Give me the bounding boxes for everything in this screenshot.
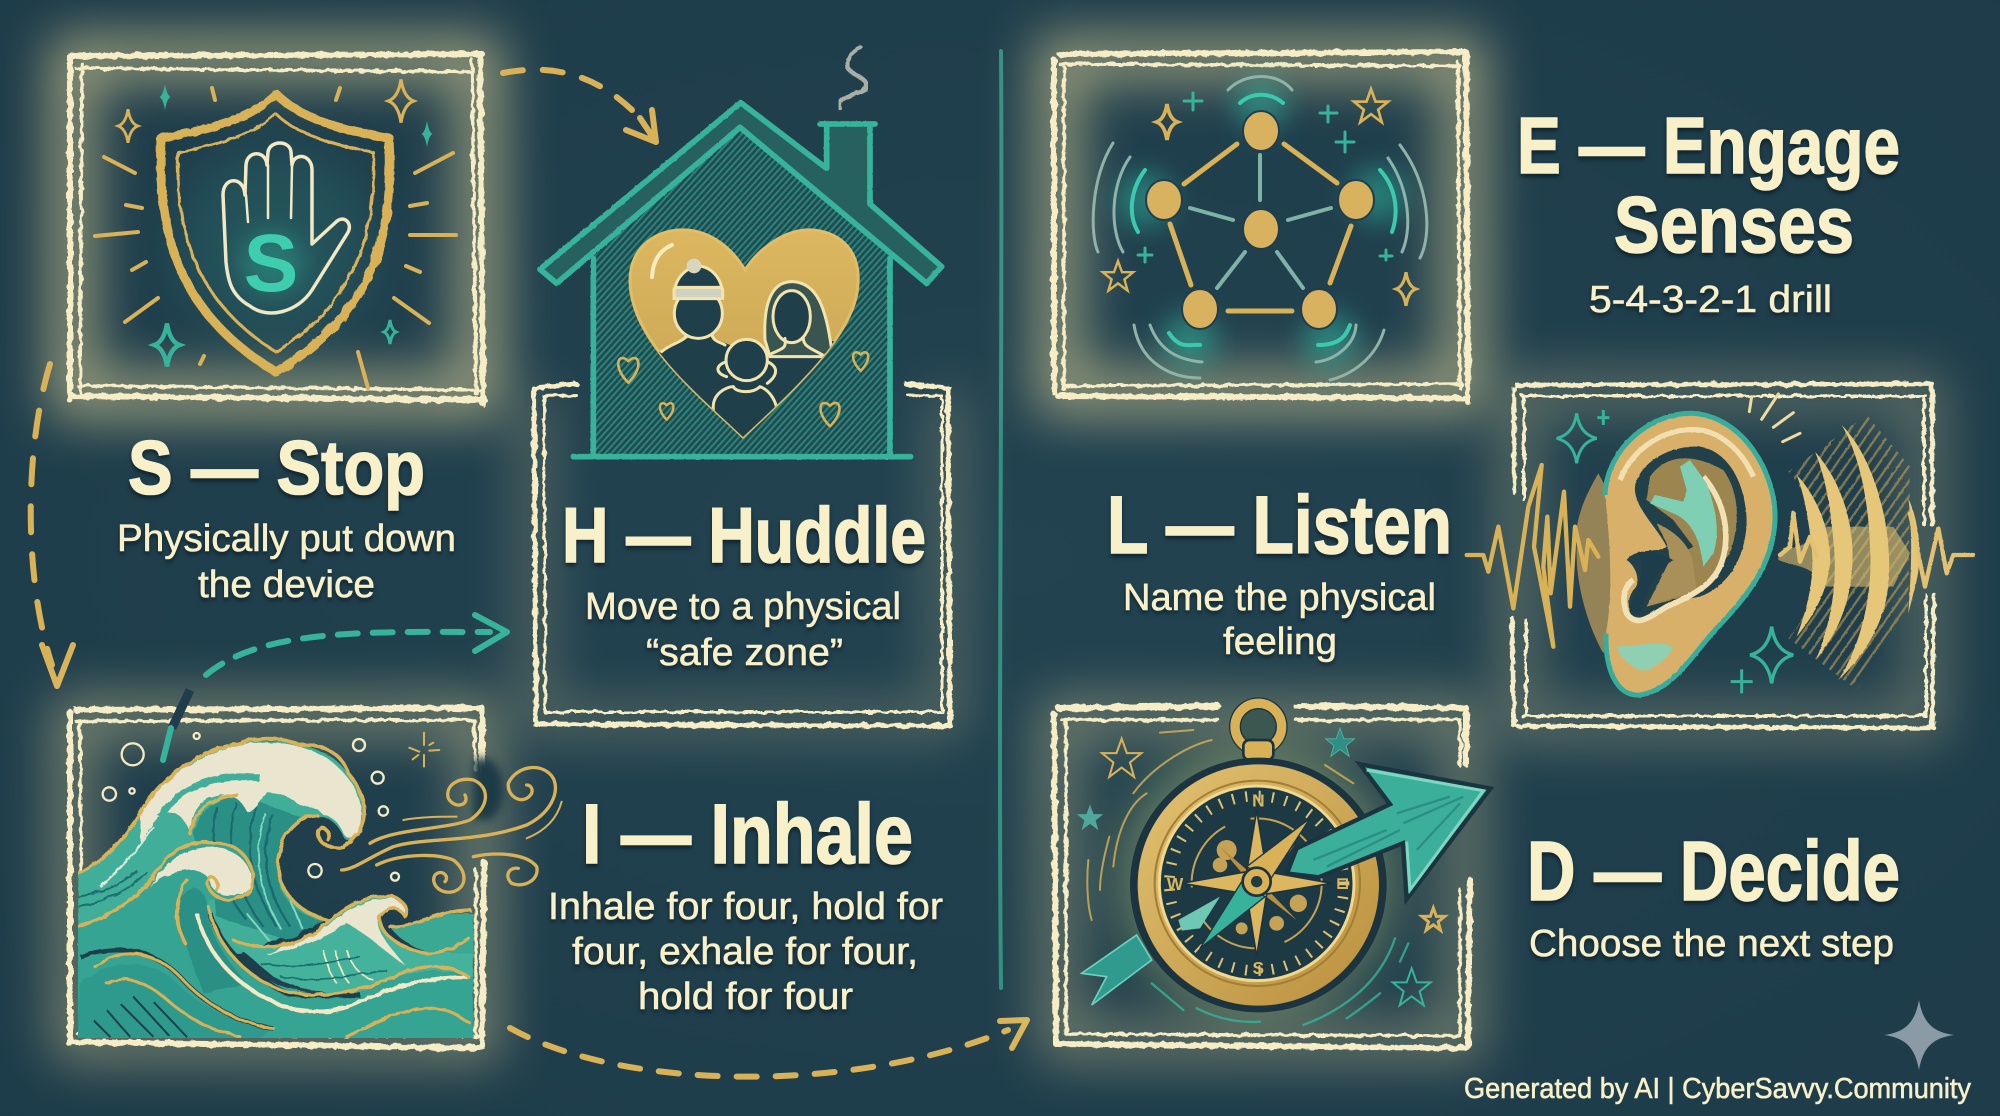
body: S Stop [117,518,456,606]
arrow: S to I [31,364,73,686]
frame [1054,52,1468,402]
arrow: S to H [503,70,656,142]
sparkles and stars [1156,104,1178,140]
compass body [1130,758,1387,1012]
panel: D Decide [1054,697,1900,1048]
smoke [840,47,867,108]
body: I Inhale: four, exhale for four, [572,931,918,973]
compass needle [1247,818,1310,880]
right wave [230,896,473,994]
body: H Huddle [585,586,901,674]
frame glow [535,392,948,720]
heading: L Listen: L — Listen [1107,480,1452,571]
arrow tail [1082,935,1152,1005]
nodes [1146,111,1374,329]
watermark sparkle [1884,1000,1954,1070]
panel: L Listen [1107,384,1973,728]
body: E: 5-4-3-2-1 drill [1589,279,1832,321]
compass letters: N [1252,791,1265,811]
small hearts [618,352,868,426]
body: L Listen: feeling [1223,621,1337,663]
body: I Inhale [548,886,943,1018]
sparkles and lines [1557,410,1793,693]
house outline [540,103,942,457]
right waveform [1778,415,1973,690]
body: L Listen [1123,577,1436,663]
frame [1054,706,1470,1048]
divider line [1000,51,1001,988]
body: I Inhale: hold for four [638,976,853,1018]
heading: E Engage Senses: Senses [1614,180,1854,269]
body: S Stop: the device [198,564,375,606]
star spark [409,733,439,767]
heading: D Decide: D — Decide [1527,824,1900,918]
compass leaves [1213,835,1307,934]
body: H Huddle: “safe zone” [646,632,843,674]
body: L Listen: Name the physical [1123,577,1436,619]
panel: E Engage Senses [1054,52,1900,402]
icon: house with family in heart [540,47,942,457]
motion marks [1087,730,1353,920]
compass pendant [1229,697,1288,760]
arcs [1093,76,1427,380]
footer credit: Generated by AI | CyberSavvy.Community [1464,1073,1971,1105]
back wave line [78,739,364,920]
rays [95,88,456,388]
waves [77,739,473,1040]
panel: I Inhale [70,708,943,1048]
shield [161,94,390,372]
panel: S Stop [70,54,484,606]
compass letters: W [1167,874,1184,894]
big arrow [1290,767,1487,893]
frame [70,708,484,1048]
family [659,258,834,437]
icon: wave and wind [77,733,562,1040]
icon: shield with hand [95,79,456,388]
house body [593,127,890,455]
left smudge [1576,473,1623,653]
body: I Inhale: Inhale for four, hold for [548,886,943,928]
arrow: I to H [163,615,507,760]
S letter: S [244,218,298,309]
bottom swells [77,964,273,1040]
body: H Huddle: Move to a physical [585,586,901,628]
ear [1605,413,1775,695]
body: S Stop: Physically put down [117,518,456,560]
body: D Decide: Choose the next step [1529,923,1894,965]
sparkles [160,84,170,110]
front wave [77,843,473,1040]
frame glow [72,58,480,396]
back foam [140,742,361,847]
hand [223,143,349,313]
compass letters: S [1253,958,1264,978]
stars [1102,739,1141,777]
heading: E Engage Senses: E — Engage [1517,101,1900,190]
teal halos [1117,79,1406,368]
icon: five senses network [1093,76,1427,380]
frame glow [1058,716,1464,1042]
frame [1512,384,1934,728]
compass star [1218,845,1297,920]
wind swirls [473,758,503,820]
heading: H Huddle: H — Huddle [562,491,926,579]
heading: I Inhale: I — Inhale [582,787,913,881]
frame glow [72,716,480,1042]
icon: compass with arrow [1077,697,1487,1025]
compass letters [1167,791,1265,978]
arrow: I to D [510,1020,1027,1077]
heart [628,228,860,439]
left waveform [1467,465,1598,647]
panel: H Huddle [534,47,950,726]
roof band [543,103,940,283]
icon: ear with sound waves [1467,394,1973,695]
links [1170,144,1351,311]
bubbles [103,733,399,881]
frame glow [1058,58,1464,393]
frame [534,384,950,726]
heading: E Engage Senses [1517,101,1900,269]
frame glow [1518,392,1926,724]
back wave [78,741,363,953]
frame [70,54,484,404]
heading: S Stop: S — Stop [128,426,425,511]
